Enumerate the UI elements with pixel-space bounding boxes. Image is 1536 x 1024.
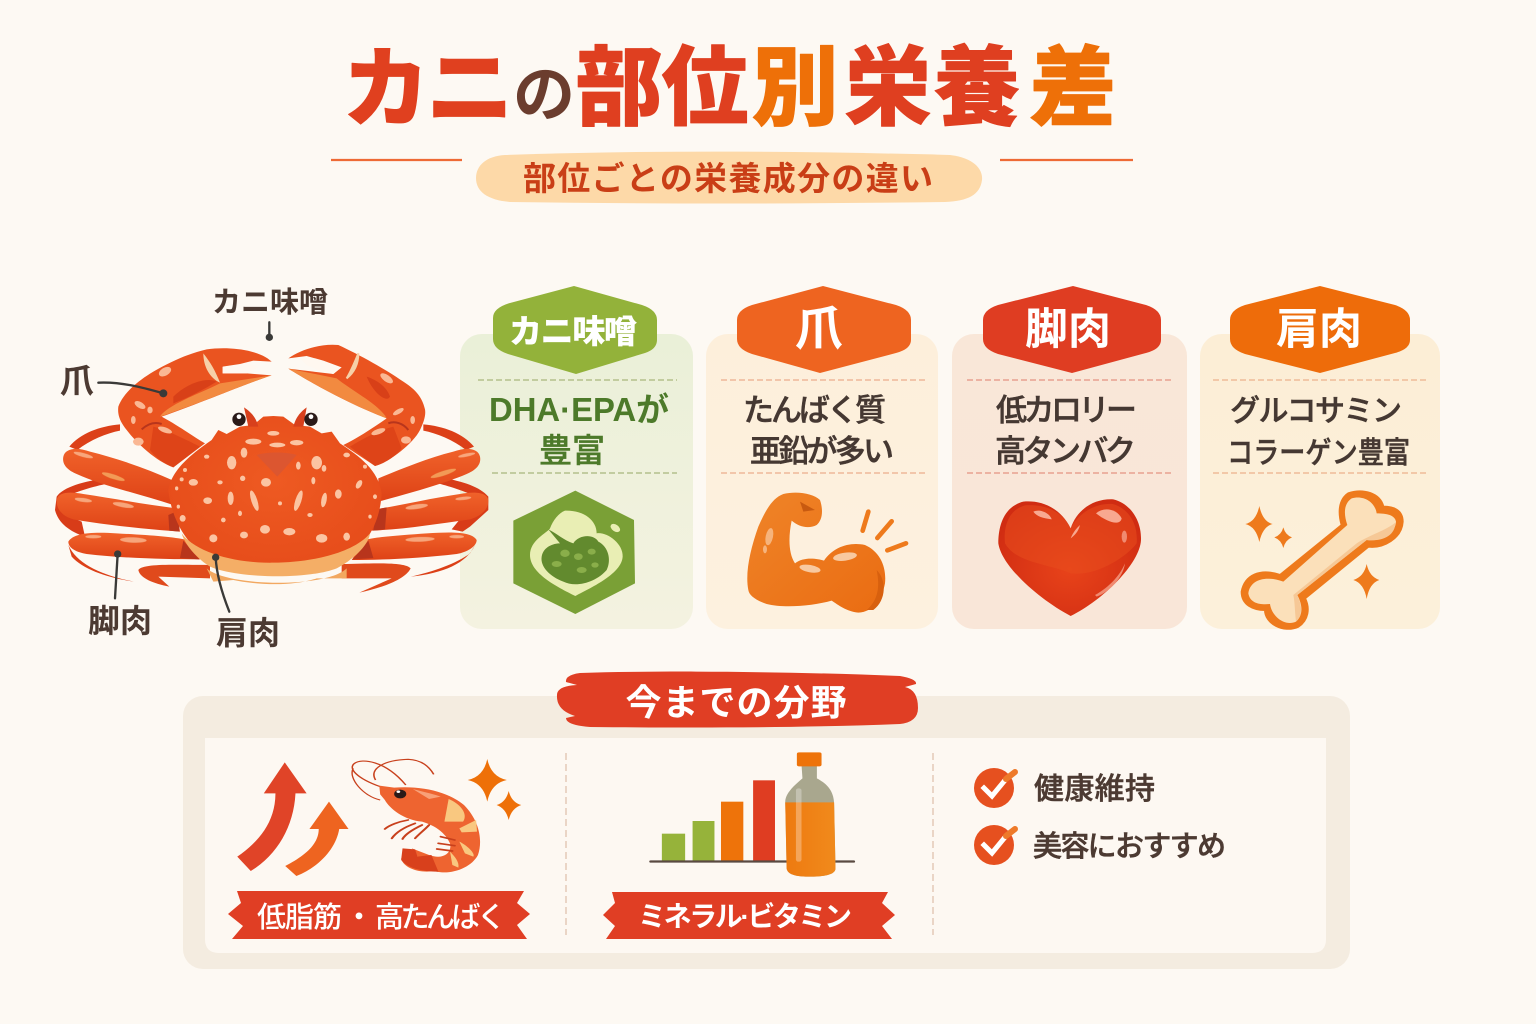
title: ニ: [426, 41, 514, 138]
title: 差: [1030, 40, 1116, 137]
ribbon: ミネラル・ビタミン: [603, 892, 895, 939]
crab legs left: [55, 424, 210, 587]
title: 養: [934, 40, 1020, 137]
title: の: [513, 61, 575, 130]
heading ribbon: [557, 672, 918, 728]
title: 部: [576, 40, 662, 137]
crab label: カニ味噌: カニ味噌: [212, 286, 328, 319]
text: たんぱく質 亜鉛が多い: [743, 393, 894, 469]
panel: 脚肉: [952, 286, 1187, 629]
ribbon: ミネラル・ビタミン: ミネラル·ビタミン: [638, 901, 852, 932]
crab label: 爪: 爪: [60, 363, 94, 401]
shrimp: [352, 759, 480, 872]
checklist item: 健康維持: [974, 768, 1155, 808]
crab eyes: [232, 407, 318, 427]
text: 低カロリー 高タンパク: 高タンバク: [995, 434, 1136, 469]
subtitle ribbon: [331, 152, 1133, 204]
badge: 爪: [737, 286, 911, 373]
leg highlights: [73, 450, 475, 543]
ribbon: 低脂肪・高たんぱく: 高たんばく: [375, 901, 506, 934]
crab shell: [168, 416, 382, 572]
crab illustration: [55, 322, 488, 612]
badge: 肩肉: [1230, 286, 1410, 373]
badge: 爪: 爪: [795, 303, 843, 356]
shell center mark: [257, 452, 297, 477]
icon: heart: [998, 499, 1141, 616]
crab label: 脚肉: 脚肉: [88, 603, 152, 639]
checklist item: 美容におすすめ: 美容におすすめ: [1033, 830, 1226, 863]
ribbon: 低脂肪・高たんぱく: 低脂筋: [257, 901, 342, 934]
arrows up: [237, 762, 349, 876]
right claw: [288, 345, 425, 466]
checklist item: 美容におすすめ: [974, 825, 1226, 865]
heading ribbon: 今までの分野: [626, 682, 846, 723]
shell spots: [175, 431, 377, 543]
crab pointer lines: [98, 322, 269, 612]
crab underside: [207, 568, 347, 584]
text: たんぱく質 亜鉛が多い: たんばく質: [743, 393, 886, 428]
bar chart: [649, 780, 855, 863]
text: DHA・EPAが豊富: 豊富: [539, 432, 605, 469]
text: たんぱく質 亜鉛が多い: 亜鉛が多い: [750, 434, 894, 469]
panel: 肩肉: [1200, 286, 1440, 629]
badge: 脚肉: 脚肉: [1025, 306, 1111, 354]
text: DHA・EPAが豊富: [489, 391, 669, 469]
panel: 今までの分野: [183, 672, 1350, 969]
title: 別: [752, 40, 838, 137]
text: 低カロリー 高タンパク: 低カロリー: [996, 393, 1137, 428]
icon: bone with sparkles: [1242, 491, 1403, 629]
text: DHA・EPAが豊富: DHA·EPAが: [489, 391, 669, 428]
text: グルコサミン コラーゲン豊富: グルコサミン: [1230, 395, 1402, 428]
chart and bottle: [649, 752, 855, 877]
title: カ: [342, 41, 430, 138]
checklist item: 健康維持: 健康維持: [1034, 773, 1155, 806]
crab label: 肩肉: 肩肉: [216, 615, 280, 651]
panel: 爪: [706, 286, 938, 629]
badge: 肩肉: 肩肉: [1276, 306, 1362, 354]
badge: カニ味噌: [493, 286, 657, 374]
badge: カニ味噌: カニ味噌: [509, 313, 637, 350]
sparkles: [468, 759, 521, 820]
icons: arrows, shrimp: [237, 759, 521, 876]
title: 位: [662, 40, 748, 137]
icon: flexed arm: [747, 493, 906, 613]
ribbon: 低脂肪・高たんぱく: [228, 891, 530, 939]
badge: 脚肉: [983, 286, 1161, 373]
title: [342, 40, 1116, 138]
crab legs right: [342, 424, 488, 593]
text: 低カロリー 高タンパク: [995, 393, 1137, 469]
title: 栄: [844, 40, 932, 137]
text: グルコサミン コラーゲン豊富: コラーゲン豊富: [1227, 437, 1410, 470]
left claw: [118, 348, 272, 467]
panel: カニ味噌: [460, 286, 693, 629]
icon: crab miso: [513, 491, 635, 614]
ribbon: 低脂肪・高たんぱく: ・: [344, 902, 374, 934]
bottle: [785, 752, 836, 877]
subtitle ribbon: 部位ごとの栄養成分の違い: [523, 160, 933, 197]
text: グルコサミン コラーゲン豊富: [1227, 395, 1410, 470]
shell beige rim: [182, 533, 370, 576]
